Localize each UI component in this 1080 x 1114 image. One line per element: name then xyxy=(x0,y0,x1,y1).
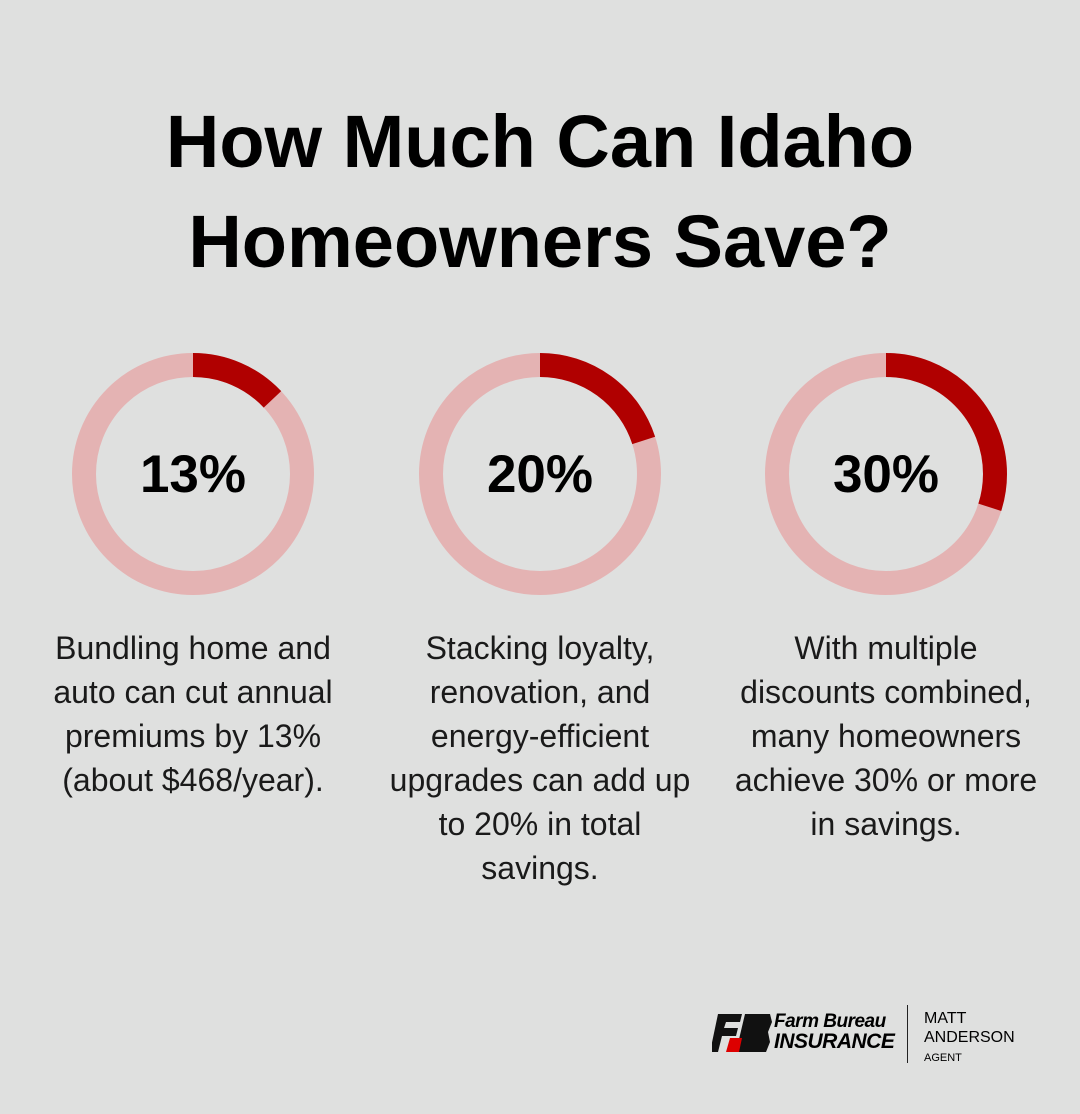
divider xyxy=(907,1005,908,1063)
text 2 xyxy=(390,630,690,886)
text 2: Stacking loyalty, xyxy=(426,630,654,666)
logo xyxy=(712,1005,1015,1064)
title xyxy=(166,100,914,283)
text 3 xyxy=(735,630,1037,842)
brand name xyxy=(774,1011,896,1053)
text 3: many homeowners xyxy=(751,718,1021,754)
text 3: in savings. xyxy=(810,806,962,842)
text 1: (about $468/year). xyxy=(62,762,324,798)
donut 13%: 13% xyxy=(140,445,246,504)
text 1: premiums by 13% xyxy=(65,718,321,754)
donut 20% xyxy=(419,353,661,595)
text 1: auto can cut annual xyxy=(53,674,333,710)
donut 30%: 30% xyxy=(833,445,939,504)
title: Homeowners Save? xyxy=(188,200,892,283)
agent xyxy=(924,1010,1015,1064)
brand name: INSURANCE xyxy=(774,1030,894,1053)
text 2: energy-efficient xyxy=(431,718,649,754)
text 2: upgrades can add up xyxy=(390,762,690,798)
title: How Much Can Idaho xyxy=(166,100,914,183)
text 3: achieve 30% or more xyxy=(735,762,1037,798)
donut 20%: 20% xyxy=(487,445,593,504)
donut 13% xyxy=(72,353,314,595)
icon: FB mark xyxy=(712,1014,772,1052)
text 2: renovation, and xyxy=(430,674,650,710)
text 1 xyxy=(53,630,333,798)
text 1: Bundling home and xyxy=(55,630,331,666)
donut 30% xyxy=(765,353,1007,595)
text 2: savings. xyxy=(481,850,599,886)
text 3: With multiple xyxy=(794,630,978,666)
agent: AGENT xyxy=(924,1052,962,1064)
agent: ANDERSON xyxy=(924,1029,1015,1046)
agent: MATT xyxy=(924,1010,966,1027)
brand name: Farm Bureau xyxy=(774,1011,886,1032)
text 3: discounts combined, xyxy=(740,674,1032,710)
text 2: to 20% in total xyxy=(439,806,641,842)
